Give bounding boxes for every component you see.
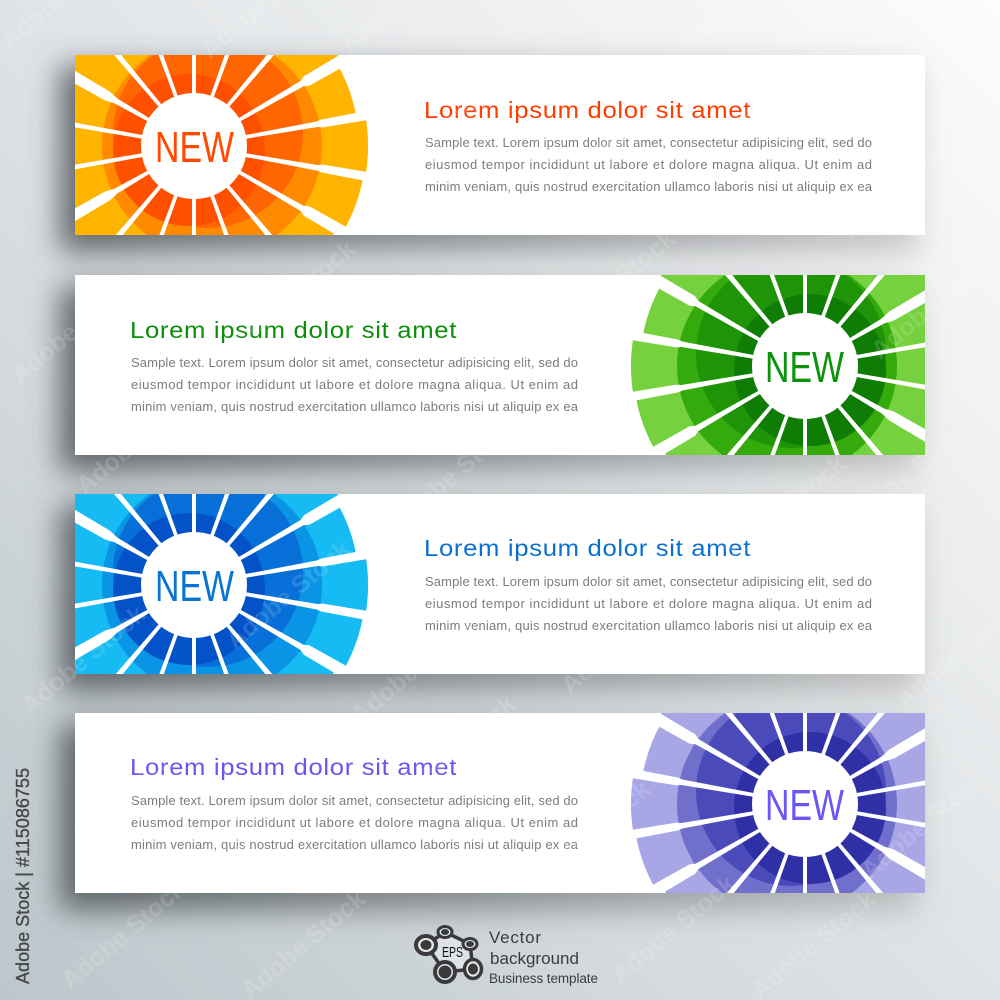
watermarks: Adobe Stock	[221, 535, 356, 655]
heading: Lorem ipsum dolor sit amet	[130, 317, 457, 343]
text block: eiusmod tempor incididunt ut labore et dolore magna aliqua. Ut enim ad	[425, 157, 872, 172]
badge label: NEW: NEW	[765, 781, 844, 830]
text block: Sample text. Lorem ipsum dolor sit amet, consectetur adipisicing elit, sed do	[425, 574, 872, 589]
watermarks: Adobe Stock	[71, 380, 206, 500]
text block: Sample text. Lorem ipsum dolor sit amet, consectetur adipisicing elit, sed do	[131, 793, 578, 808]
watermarks: Adobe Stock	[16, 600, 151, 720]
panel: blue banner	[75, 494, 925, 674]
watermarks: Adobe Stock	[716, 450, 851, 570]
watermarks: Adobe Stock	[606, 870, 741, 990]
watermarks: Adobe Stock	[866, 245, 1000, 365]
badge label: NEW: NEW	[155, 562, 234, 611]
watermarks: Adobe Stock	[186, 770, 321, 890]
text block: eiusmod tempor incididunt ut labore et dolore magna aliqua. Ut enim ad	[131, 815, 578, 830]
text block: minim veniam, quis nostrud exercitation ullamco laboris nisi ut aliquip ex ea	[131, 837, 579, 852]
text block: eiusmod tempor incididunt ut labore et dolore magna aliqua. Ut enim ad	[131, 377, 578, 392]
text block: minim veniam, quis nostrud exercitation ullamco laboris nisi ut aliquip ex ea	[425, 179, 873, 194]
watermarks: Adobe Stock	[66, 730, 201, 850]
text block: minim veniam, quis nostrud exercitation ullamco laboris nisi ut aliquip ex ea	[131, 399, 579, 414]
sunburst: orange	[75, 55, 368, 235]
watermarks: Adobe Stock	[416, 335, 551, 455]
watermarks: Adobe Stock	[371, 75, 506, 195]
banner shadows	[60, 66, 918, 910]
watermarks: Adobe Stock	[556, 580, 691, 700]
watermarks: Adobe Stock	[56, 875, 191, 995]
footer caption: Business template	[489, 971, 598, 986]
badge label: NEW: NEW	[155, 123, 234, 172]
text block	[425, 135, 873, 194]
text block: Sample text. Lorem ipsum dolor sit amet, consectetur adipisicing elit, sed do	[425, 135, 872, 150]
sunburst: purple	[630, 713, 925, 893]
badge label: NEW: NEW	[765, 343, 844, 392]
sunburst: green	[630, 275, 925, 455]
panel: green banner	[75, 275, 925, 455]
watermarks: Adobe Stock	[836, 125, 971, 245]
panel: orange banner	[75, 55, 925, 235]
watermarks: Adobe Stock	[226, 235, 361, 355]
watermarks: Adobe Stock	[346, 610, 481, 730]
heading: Lorem ipsum dolor sit amet	[424, 535, 751, 561]
watermarks: Adobe Stock	[386, 690, 521, 810]
watermarks: Adobe Stock	[841, 415, 976, 535]
footer caption	[489, 928, 598, 986]
footer caption: Vector	[489, 928, 541, 947]
text block	[131, 355, 579, 414]
watermarks: Adobe Stock	[546, 225, 681, 345]
heading: Lorem ipsum dolor sit amet	[130, 754, 457, 780]
sunburst: blue	[75, 494, 368, 674]
watermarks: Adobe Stock	[6, 270, 141, 390]
text block: minim veniam, quis nostrud exercitation ullamco laboris nisi ut aliquip ex ea	[425, 618, 873, 633]
icon: EPS logo: EPS	[442, 944, 463, 961]
watermarks: Adobe Stock	[386, 415, 521, 535]
footer caption: background	[490, 949, 579, 968]
text block: Sample text. Lorem ipsum dolor sit amet, consectetur adipisicing elit, sed do	[131, 355, 578, 370]
watermarks: Adobe Stock	[686, 50, 821, 170]
text block	[131, 793, 579, 852]
watermarks: Adobe Stock	[856, 765, 991, 885]
text block	[425, 574, 873, 633]
text block: eiusmod tempor incididunt ut labore et dolore magna aliqua. Ut enim ad	[425, 596, 872, 611]
heading: Lorem ipsum dolor sit amet	[424, 97, 751, 123]
panel: purple banner	[75, 713, 925, 893]
stock credit: Adobe Stock | #115086755	[13, 768, 33, 984]
icon: EPS logo	[416, 926, 482, 982]
watermarks: Adobe Stock	[501, 115, 636, 235]
watermarks: Adobe Stock	[521, 775, 656, 895]
